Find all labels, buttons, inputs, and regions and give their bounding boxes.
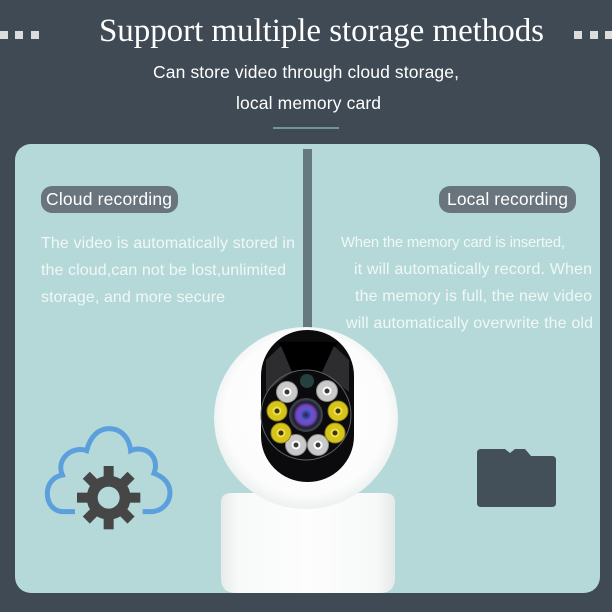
lens	[290, 399, 322, 431]
icon: gear	[77, 466, 140, 529]
decorative squares: left	[0, 31, 39, 39]
text block: local recording description	[341, 235, 593, 332]
yellow LEDs	[267, 401, 348, 443]
text block: local recording description: the memory is full, the new video	[355, 288, 592, 305]
decorative squares: right	[574, 31, 612, 39]
title: Support multiple storage methods	[99, 13, 544, 49]
heading: local recording: Local recording	[447, 189, 568, 209]
text block: cloud recording description: storage, and more secure	[41, 289, 225, 306]
panel: storage methods	[15, 144, 600, 593]
icon: cloud with gear	[47, 429, 170, 529]
icon: memory card	[477, 449, 556, 507]
sensor	[300, 374, 314, 388]
camera face	[261, 330, 354, 482]
camera mount bar	[303, 149, 312, 329]
text block: cloud recording description: the cloud,can not be lost,unlimited	[41, 262, 286, 279]
heading: cloud recording: Cloud recording	[46, 189, 172, 209]
camera sphere	[214, 327, 398, 509]
heading: cloud recording	[41, 186, 178, 213]
subtitle	[153, 62, 459, 113]
camera base	[221, 493, 395, 593]
text block: local recording description: it will automatically record. When	[354, 261, 592, 278]
silver LEDs	[276, 380, 338, 456]
subtitle: Can store video through cloud storage,	[153, 62, 459, 82]
subtitle: local memory card	[236, 93, 381, 113]
text block: cloud recording description	[41, 235, 295, 306]
heading: local recording	[439, 186, 576, 213]
text block: local recording description: When the memory card is inserted,	[341, 235, 565, 251]
camera illustration	[214, 327, 398, 593]
text block: local recording description: will automatically overwrite the old	[345, 315, 593, 332]
text block: cloud recording description: The video is automatically stored in	[41, 235, 295, 252]
